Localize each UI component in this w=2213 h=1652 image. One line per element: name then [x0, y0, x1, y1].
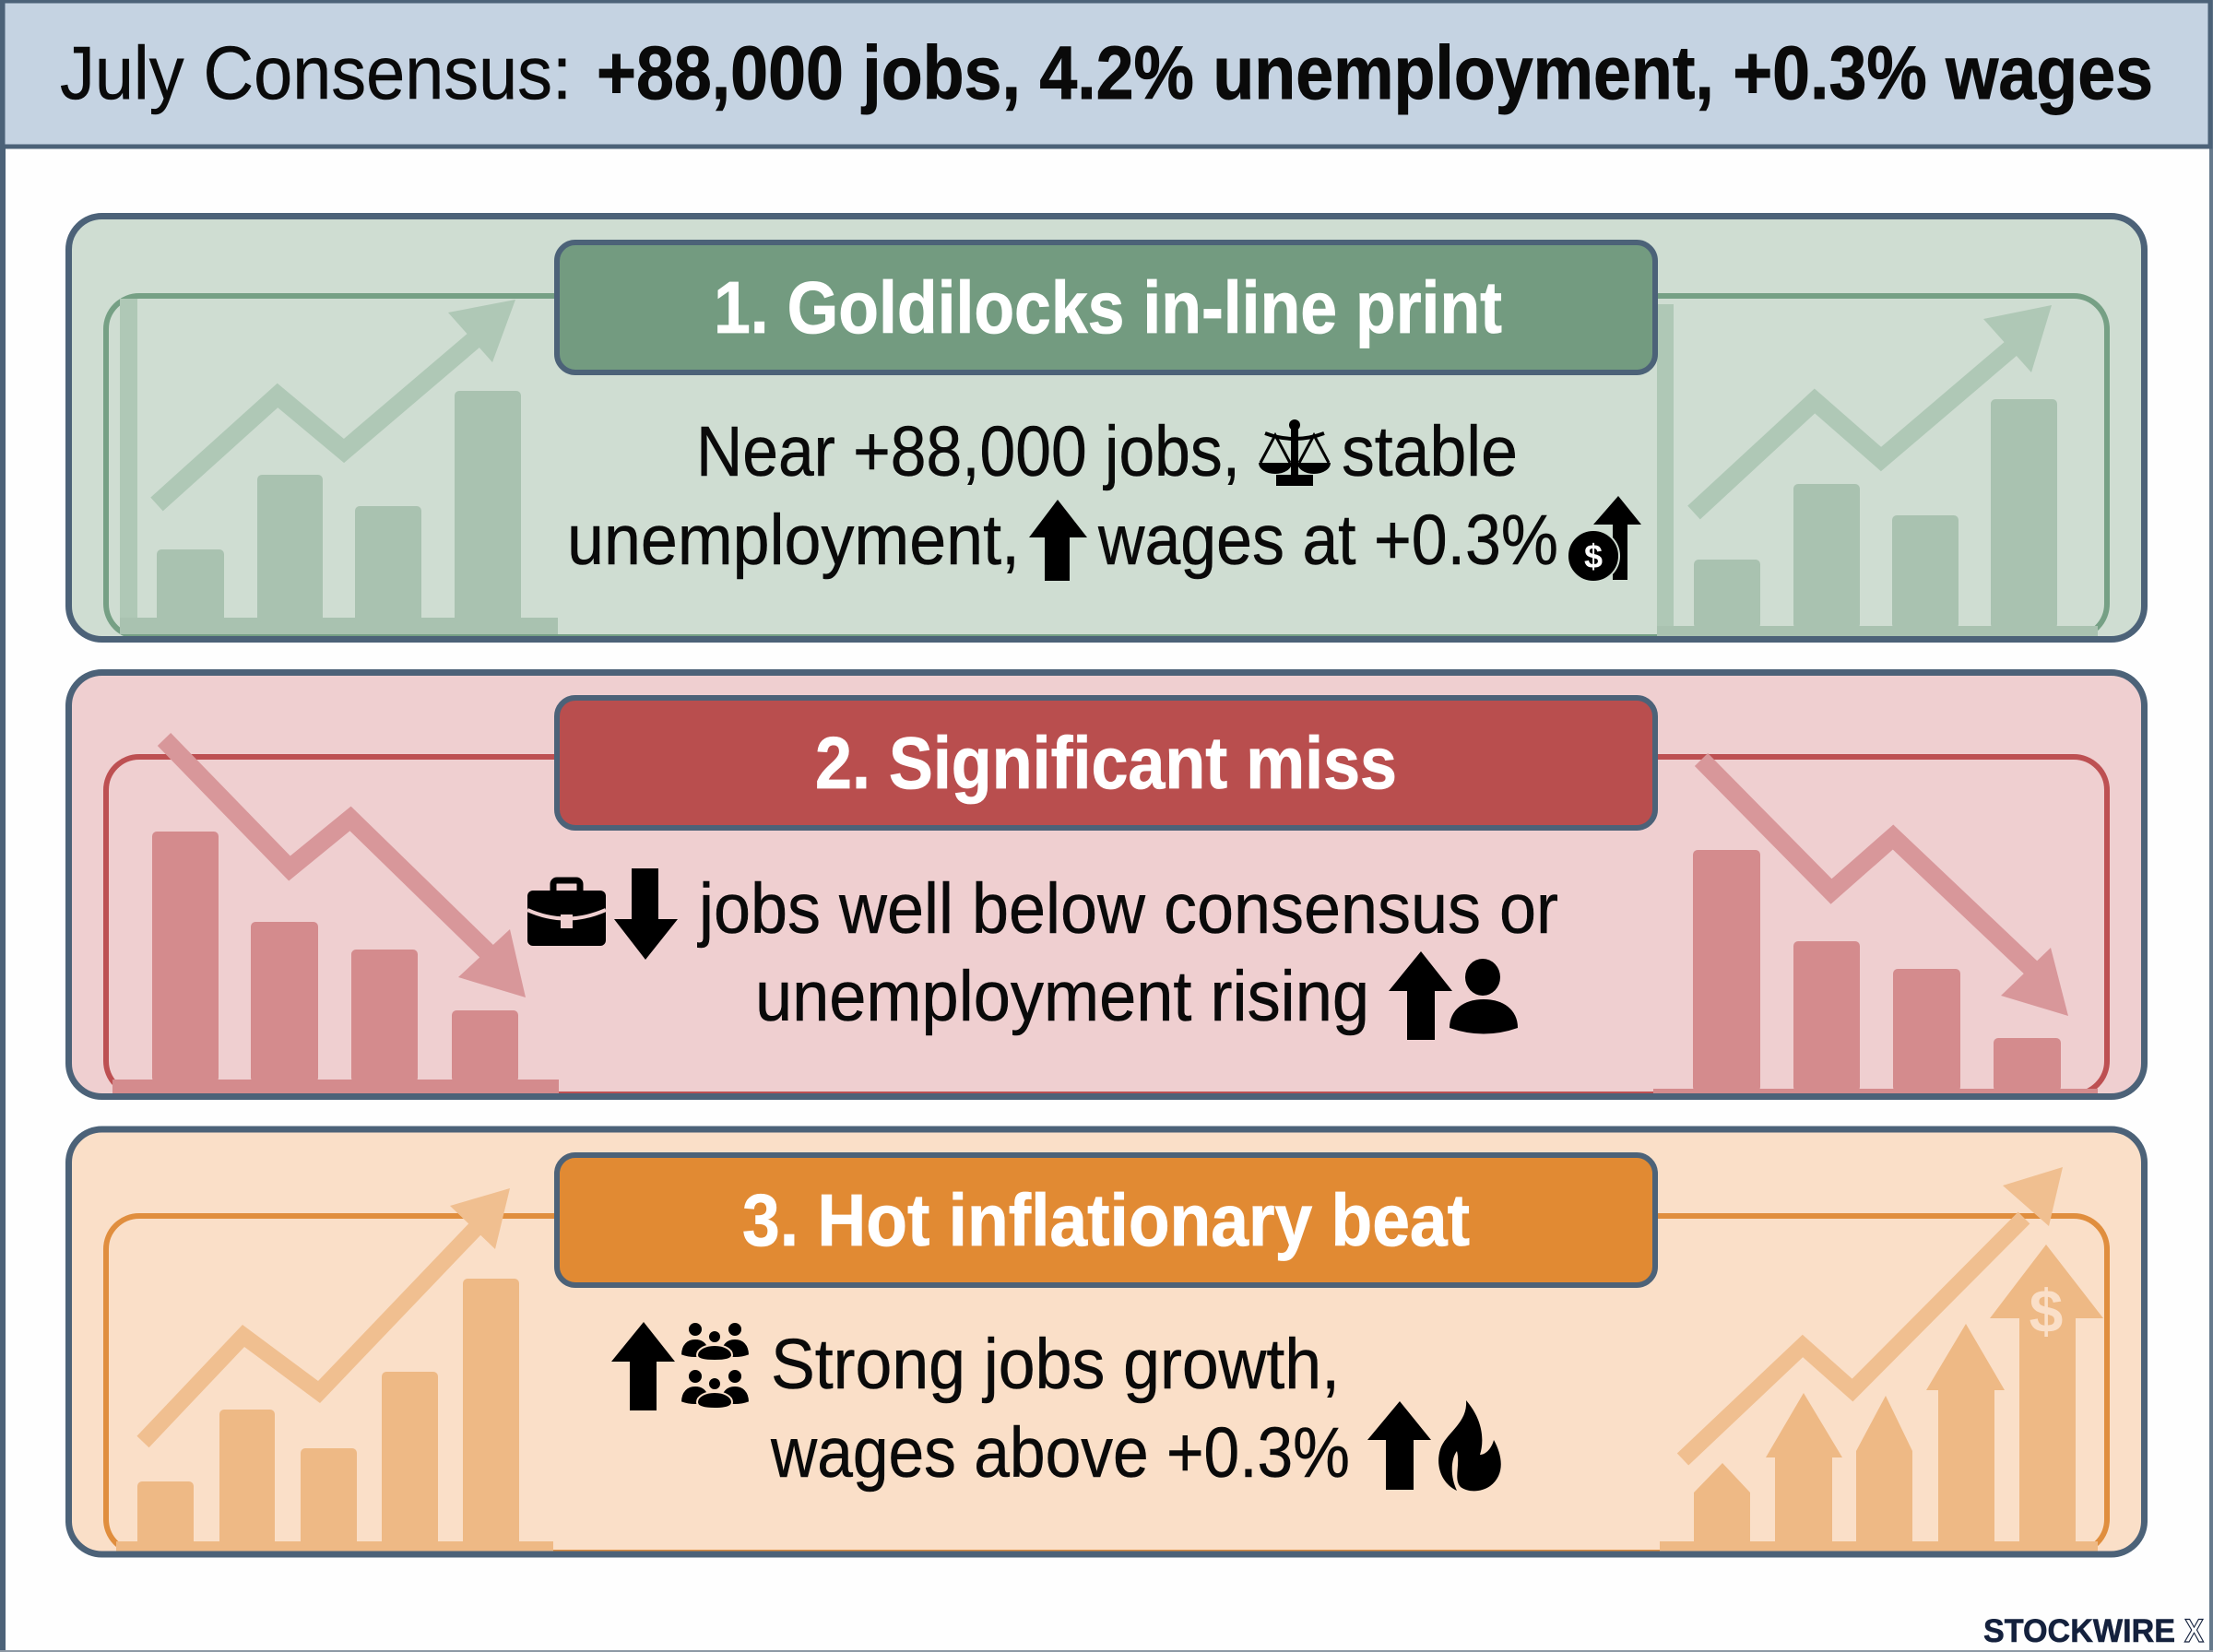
icon: up arrow: [1029, 500, 1087, 581]
icon: dollar sign: $: [2030, 1277, 2063, 1345]
body text: hot beat: wages above +0.3%: [770, 1413, 1350, 1493]
logo: STOCKWIRE X: X: [2184, 1613, 2205, 1649]
body text: goldilocks: Near +88,000 jobs,: [696, 412, 1240, 491]
heading: 1. Goldilocks in-line print: 1. Goldilocks in-line print: [714, 266, 1502, 348]
body text: goldilocks: unemployment,: [567, 501, 1020, 580]
icon: briefcase: [527, 880, 606, 946]
body text: goldilocks: wages at +0.3%: [1097, 501, 1558, 580]
body text: miss: [697, 869, 1558, 1036]
chart: right rising bars: [1657, 304, 2098, 638]
chart: left rising bars: [116, 1188, 553, 1552]
body text: goldilocks: [567, 412, 1558, 580]
icon: up arrow: [611, 1322, 675, 1410]
panel: hot inflationary beat: [68, 1129, 2145, 1554]
heading: 2. Significant miss: [557, 698, 1655, 828]
logo: STOCKWIRE X: STOCKWIRE: [1983, 1613, 2175, 1649]
icon: person: [1450, 959, 1518, 1034]
heading: 2. Significant miss: 2. Significant miss: [815, 722, 1397, 804]
heading: 3. Hot inflationary beat: 3. Hot inflationary beat: [742, 1179, 1470, 1261]
body text: miss: unemployment rising: [755, 957, 1369, 1036]
body text: hot beat: [770, 1325, 1350, 1493]
heading: 1. Goldilocks in-line print: [557, 242, 1655, 372]
body text: miss: jobs well below consensus or: [697, 869, 1558, 949]
icon: rising wage coin: $: [1584, 537, 1603, 575]
panel: goldilocks in-line print: [68, 216, 2145, 640]
heading: 3. Hot inflationary beat: [557, 1155, 1655, 1285]
panel: significant miss: [68, 673, 2145, 1097]
icon: up arrow: [1367, 1401, 1431, 1490]
icon: rising wage coin: [1568, 496, 1641, 582]
chart: right rising arrows with dollar: [1660, 1167, 2103, 1552]
body text: goldilocks: stable: [1342, 412, 1518, 491]
icon: flame: [1438, 1400, 1501, 1491]
body text: hot beat: Strong jobs growth,: [771, 1325, 1340, 1404]
header banner: [3, 1, 2210, 147]
title: July Consensus:: [60, 31, 572, 115]
icon: up arrow: [1389, 951, 1452, 1040]
icon: down arrow: [614, 868, 678, 960]
chart: left rising bars: [120, 299, 558, 634]
chart: left falling bars: [112, 739, 559, 1094]
icon: balance scale: [1259, 419, 1331, 486]
icon: two crowds of workers: [680, 1322, 750, 1409]
chart: right falling bars: [1653, 760, 2098, 1094]
